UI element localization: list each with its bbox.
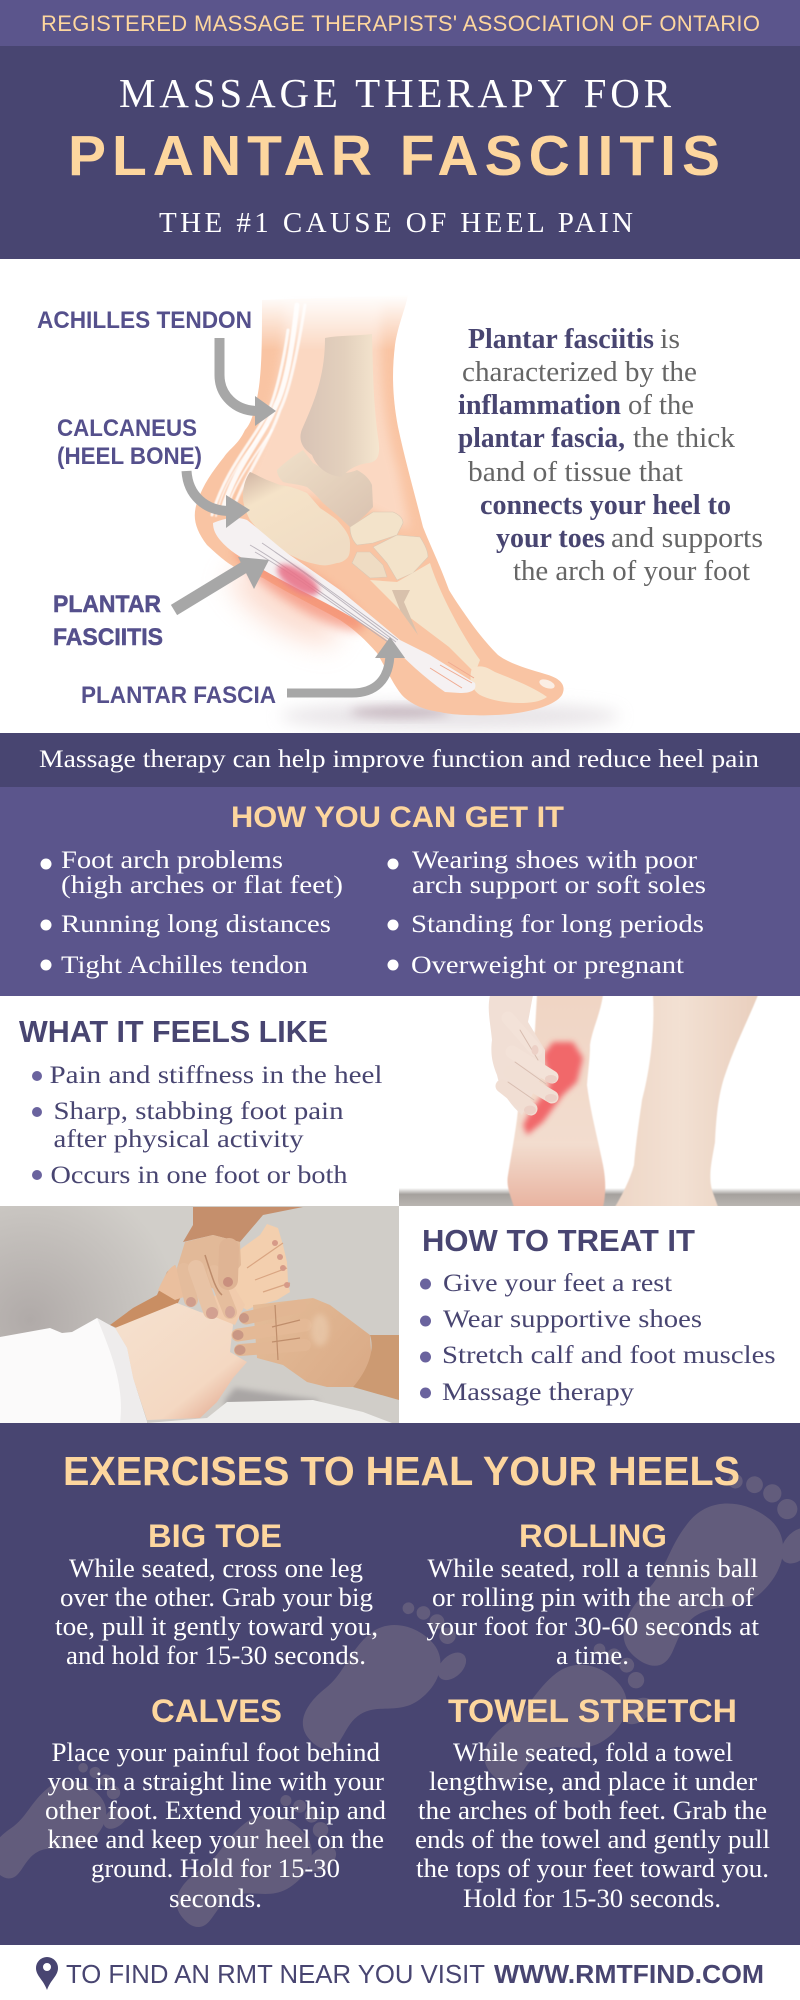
label: calcaneus: (HEEL BONE)	[57, 443, 202, 470]
exercise: towel stretch: lengthwise, and place it under	[429, 1767, 757, 1796]
exercise: rolling	[426, 1518, 760, 1670]
list: causes right: Overweight or pregnant	[411, 952, 684, 979]
list: treatments: Massage therapy	[442, 1379, 635, 1406]
exercise: big toe: toe, pull it gently toward you,	[55, 1612, 378, 1641]
exercise: rolling: a time.	[556, 1641, 629, 1670]
text: definition: band of tissue that	[468, 457, 683, 488]
exercise: big toe: BIG TOE	[148, 1518, 282, 1554]
exercise: towel stretch: ends of the towel and gently pull	[415, 1825, 770, 1854]
footer url: WWW.RMTFIND.COM	[494, 1959, 764, 1989]
text: definition: the thick	[633, 423, 735, 454]
list: treatments: Give your feet a rest	[443, 1270, 672, 1297]
list: treatments: Wear supportive shoes	[443, 1306, 702, 1333]
text: definition: the arch of your foot	[513, 556, 750, 587]
list: causes left: Running long distances	[61, 911, 331, 938]
text: definition: inflammation	[458, 390, 621, 421]
text: definition: plantar fascia,	[458, 423, 625, 454]
heading: WHAT IT FEELS LIKE	[19, 1014, 328, 1049]
exercise: big toe: and hold for 15-30 seconds.	[66, 1641, 366, 1670]
text: definition	[458, 324, 763, 587]
arrow: plantar fasciitis	[174, 557, 269, 610]
icon: location pin	[36, 1957, 58, 1990]
arrow: plantar fascia	[287, 637, 405, 693]
list: symptoms: Sharp, stabbing foot pain	[54, 1098, 344, 1125]
exercise: towel stretch: Hold for 15-30 seconds.	[463, 1884, 721, 1913]
label: plantar fasciitis: PLANTAR	[53, 591, 161, 618]
text: definition: is	[660, 324, 680, 355]
list: symptoms: after physical activity	[54, 1126, 304, 1153]
photo: heel pain	[399, 995, 800, 1207]
list: causes right: Wearing shoes with poor	[412, 847, 698, 874]
panel: what it feels like	[0, 996, 399, 1206]
exercise: towel stretch: the arches of both feet. Grab the	[418, 1796, 767, 1825]
photo: foot massage	[0, 1206, 399, 1423]
exercise: towel stretch: While seated, fold a towel	[453, 1738, 733, 1767]
subtitle: THE #1 CAUSE OF HEEL PAIN	[159, 207, 633, 239]
text: definition: your toes	[496, 523, 605, 554]
text: definition: of the	[628, 390, 694, 421]
text: definition: characterized by the	[462, 357, 697, 388]
heading: EXERCISES TO HEAL YOUR HEELS	[63, 1448, 740, 1494]
illustration: foot anatomy	[195, 295, 620, 730]
panel: exercises	[0, 1423, 800, 1957]
exercise: calves: other foot. Extend your hip and	[45, 1796, 386, 1825]
exercise: towel stretch: TOWEL STRETCH	[448, 1693, 737, 1729]
exercise: calves: you in a straight line with your	[48, 1767, 384, 1796]
list: symptoms: Pain and stiffness in the heel	[50, 1062, 383, 1089]
association name: REGISTERED MASSAGE THERAPISTS' ASSOCIATION OF ONTARIO	[41, 11, 760, 36]
exercise: towel stretch	[415, 1693, 770, 1913]
top band	[0, 0, 800, 46]
list: symptoms: Occurs in one foot or both	[50, 1162, 348, 1189]
label: calcaneus	[57, 415, 202, 470]
list: symptoms	[32, 1062, 383, 1189]
text: definition: connects your heel to	[480, 490, 731, 521]
exercise: calves: ground. Hold for 15-30	[91, 1854, 340, 1883]
background footprints	[0, 1457, 800, 1957]
arrow: calcaneus	[186, 471, 250, 528]
label: plantar fasciitis: FASCIITIS	[53, 624, 163, 651]
list: causes right	[388, 847, 706, 979]
label: achilles tendon: ACHILLES TENDON	[37, 307, 252, 334]
list: causes right: Standing for long periods	[411, 911, 704, 938]
list: treatments	[420, 1270, 776, 1406]
label: calcaneus: CALCANEUS	[57, 415, 197, 442]
list: causes left: Tight Achilles tendon	[61, 952, 309, 979]
exercise: calves: CALVES	[151, 1693, 282, 1729]
footer call to action: TO FIND AN RMT NEAR YOU VISIT	[66, 1959, 485, 1989]
exercise: rolling: ROLLING	[519, 1518, 667, 1554]
heading: HOW YOU CAN GET IT	[231, 801, 564, 834]
list: causes left	[40, 847, 343, 979]
exercise: calves	[45, 1693, 386, 1913]
title line 2: PLANTAR FASCIITIS	[68, 124, 720, 188]
title line 1: MASSAGE THERAPY FOR	[119, 70, 672, 116]
footer	[0, 1945, 800, 2000]
exercise: rolling: While seated, roll a tennis ball	[428, 1554, 758, 1583]
list: treatments: Stretch calf and foot muscles	[442, 1342, 776, 1369]
exercise: towel stretch: the tops of your feet toward you.	[416, 1854, 769, 1883]
list: causes left: Foot arch problems	[61, 847, 283, 874]
exercise: calves: seconds.	[169, 1884, 262, 1913]
panel: how to treat it	[399, 1206, 800, 1423]
exercise: rolling: or rolling pin with the arch of	[432, 1583, 754, 1612]
list: causes left: (high arches or flat feet)	[61, 872, 343, 899]
banner: massage therapy benefit: Massage therapy can help improve function and reduce heel pain	[39, 746, 760, 773]
heading: HOW TO TREAT IT	[422, 1223, 695, 1258]
title panel	[0, 46, 800, 259]
text: definition: and supports	[611, 523, 763, 554]
banner: massage therapy benefit	[0, 733, 800, 787]
exercise: big toe: While seated, cross one leg	[69, 1554, 363, 1583]
exercise: rolling: your foot for 30-60 seconds at	[426, 1612, 760, 1641]
exercise: big toe	[55, 1518, 378, 1670]
label: plantar fasciitis	[53, 591, 163, 651]
exercise: calves: Place your painful foot behind	[52, 1738, 380, 1767]
list: causes right: arch support or soft soles	[412, 872, 706, 899]
panel: how you can get it	[0, 787, 800, 996]
exercise: big toe: over the other. Grab your big	[60, 1583, 373, 1612]
arrow: achilles tendon	[220, 338, 276, 426]
exercise: calves: knee and keep your heel on the	[48, 1825, 384, 1854]
label: plantar fascia: PLANTAR FASCIA	[81, 682, 276, 709]
text: definition: Plantar fasciitis	[468, 324, 654, 355]
panel: foot anatomy	[38, 300, 762, 733]
